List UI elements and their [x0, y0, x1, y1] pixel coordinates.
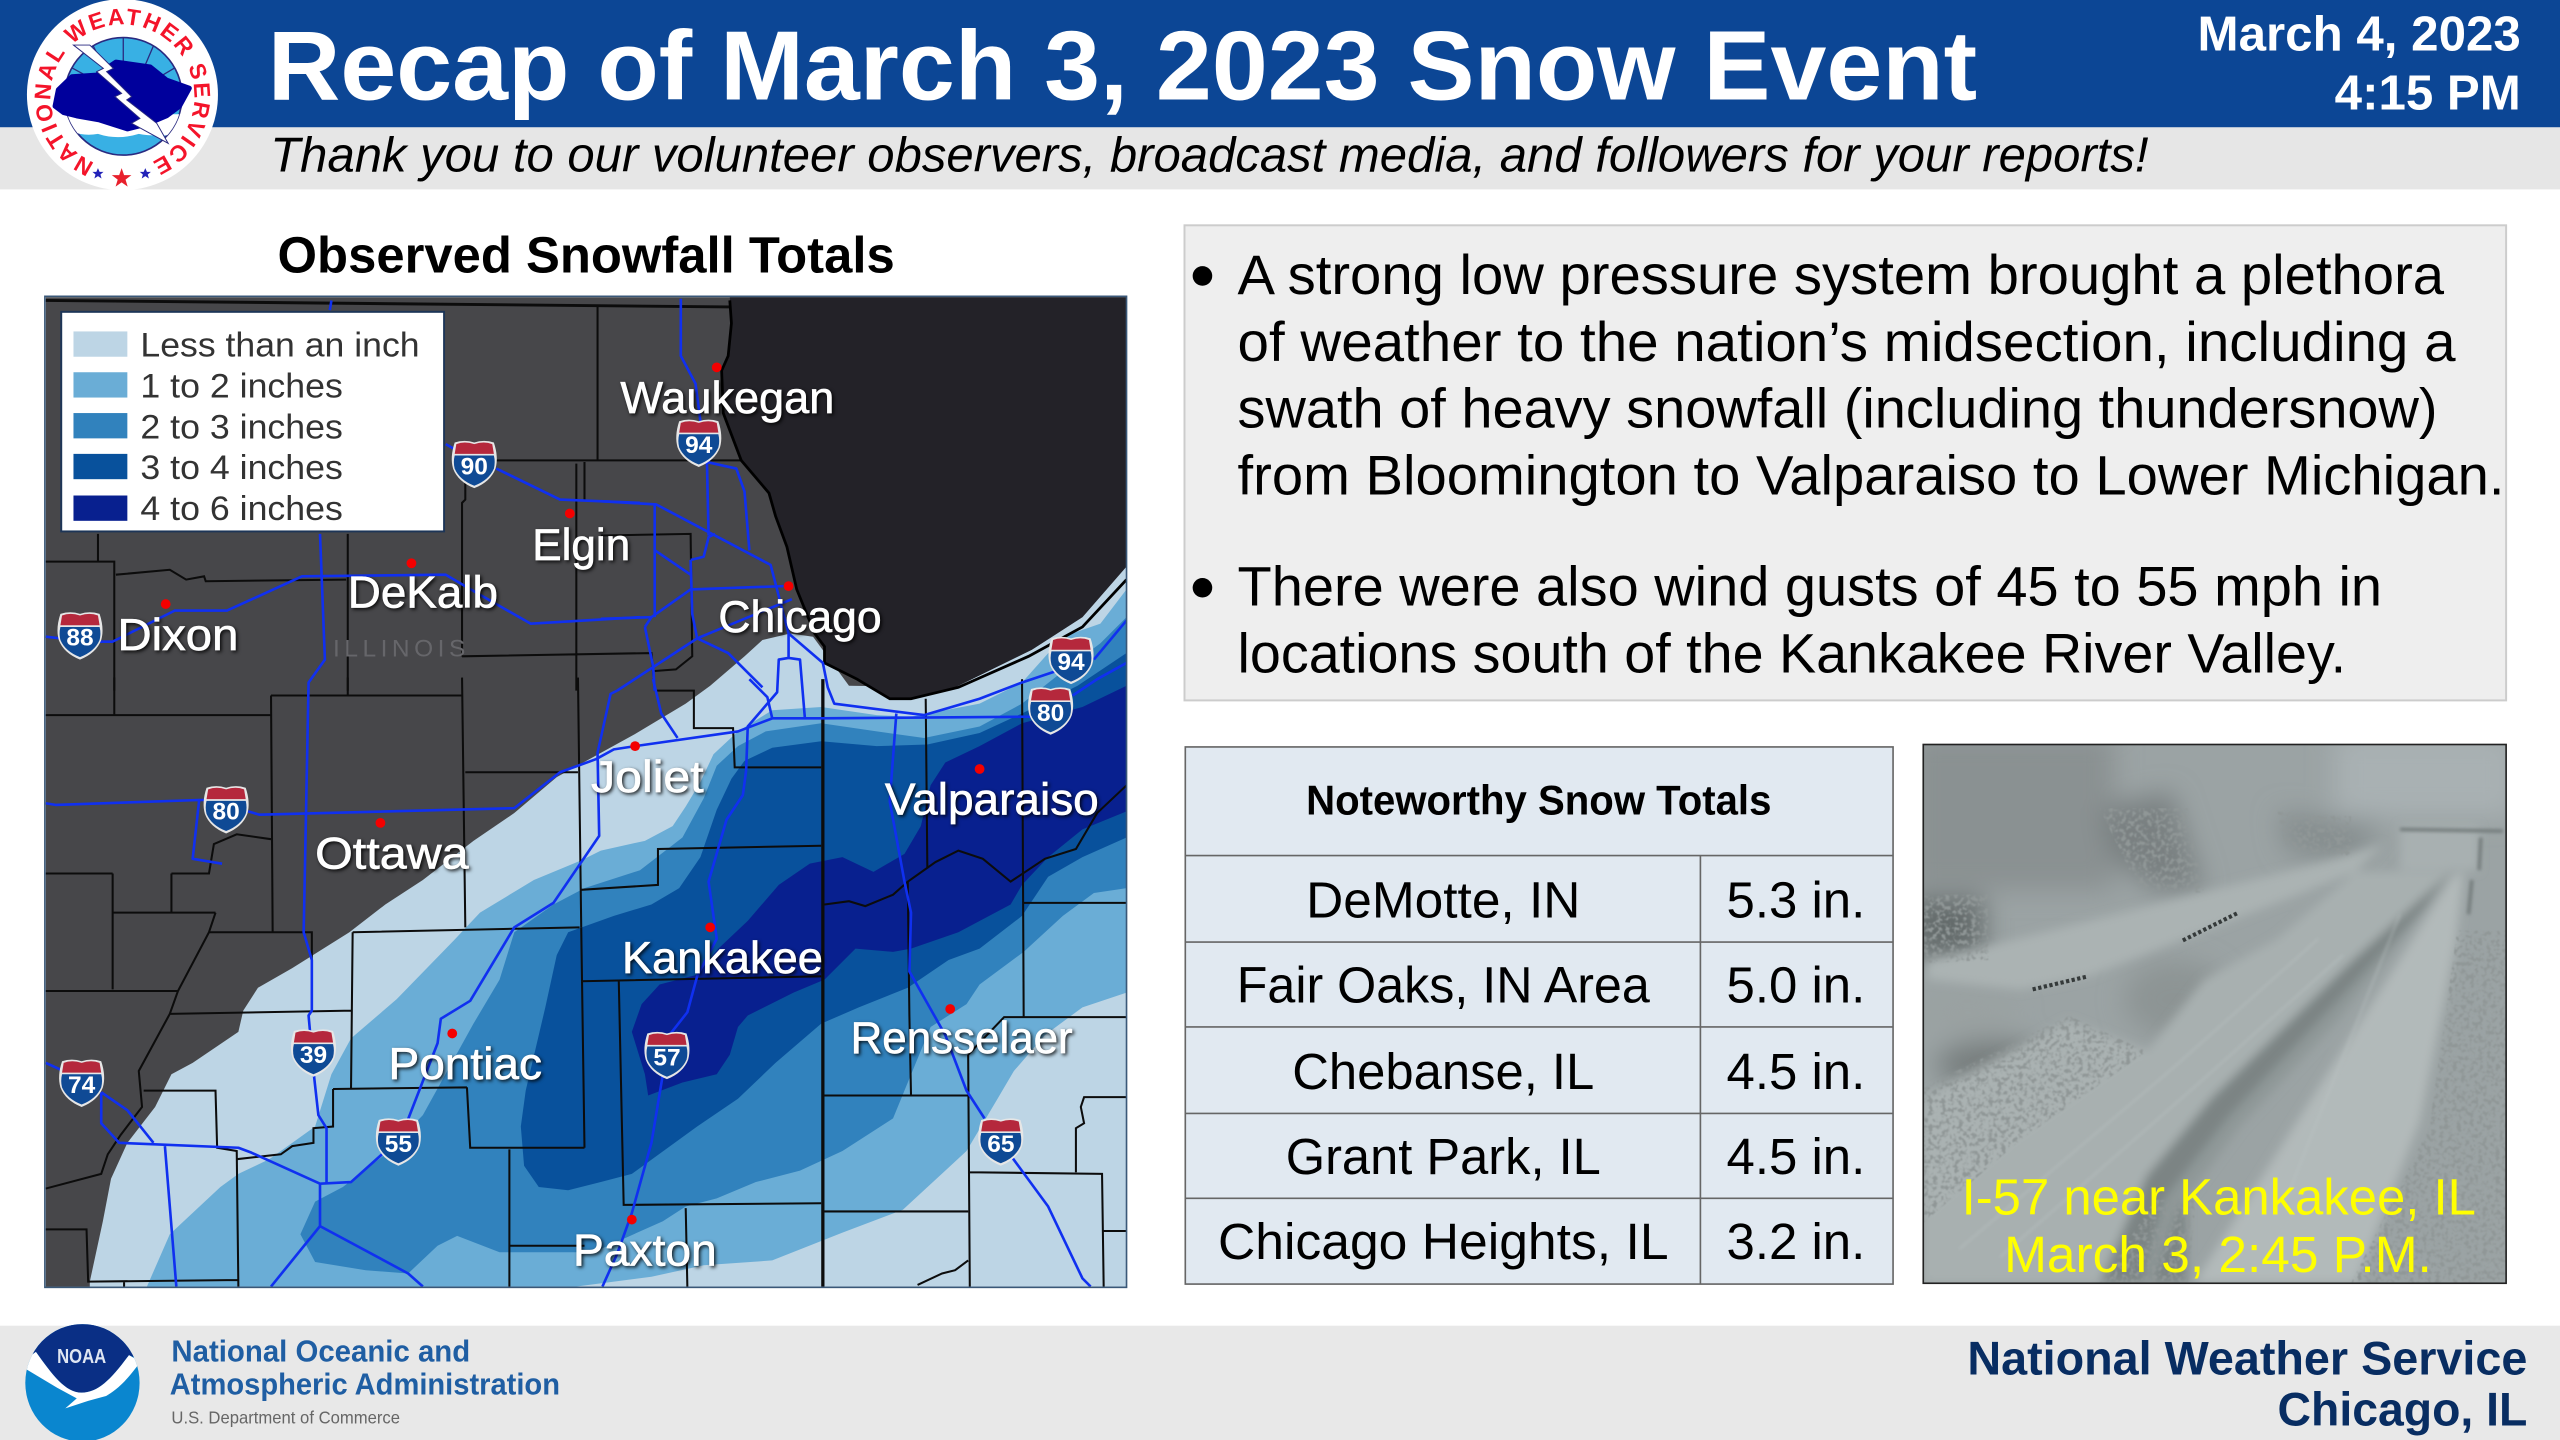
table: noteworthy snow totals: 3.2 in.: [1727, 1213, 1865, 1270]
panel: snowfall map: [45, 296, 1127, 1287]
table: noteworthy snow totals: 5.3 in.: [1727, 872, 1865, 929]
photo caption: March 3, 2:45 P.M.: [2004, 1226, 2432, 1283]
city labels: Rensselaer: [851, 1014, 1073, 1063]
table: noteworthy snow totals: Grant Park, IL: [1286, 1128, 1601, 1185]
legend: 4 to 6 inches: [140, 490, 343, 528]
table: noteworthy snow totals: Chebanse, IL: [1292, 1043, 1594, 1100]
map heading: Observed Snowfall Totals: [278, 227, 895, 284]
issue date and time: 4:15 PM: [2335, 66, 2521, 120]
table: noteworthy snow totals: [1185, 747, 1893, 1284]
state label: Illinois: ILLINOIS: [333, 635, 465, 662]
table: noteworthy snow totals: DeMotte, IN: [1306, 872, 1580, 929]
bullet: snowfall summary: [1193, 244, 2504, 507]
city labels: Chicago: [718, 593, 882, 642]
shield: I-90: [452, 441, 497, 488]
city labels: [118, 374, 1099, 1275]
shield: I-57: 57: [653, 1044, 681, 1071]
issue date and time: March 4, 2023: [2198, 8, 2521, 62]
city labels: Valparaiso: [885, 776, 1099, 825]
shield: I-65: [978, 1118, 1023, 1166]
bullet: snowfall summary: of weather to the nation’s midsection, including a: [1238, 311, 2456, 373]
shield: I-80 east: 80: [1037, 700, 1064, 727]
header bar: [0, 0, 2560, 127]
shield: I-65: 65: [987, 1131, 1014, 1158]
map frame: [45, 296, 1127, 1287]
city labels: Dixon: [118, 611, 238, 660]
shield: I-94 north: 94: [685, 432, 713, 459]
shield: I-94 north: [676, 420, 721, 467]
icon: NOAA logo: NOAA: [57, 1346, 106, 1368]
legend: 3 to 4 inches: [140, 449, 343, 487]
legend: 1 to 2 inches: [140, 368, 343, 406]
bullet: wind gusts: There were also wind gusts of 45 to 55 mph in: [1238, 556, 2382, 618]
subtitle: Thank you to our volunteer observers, broadcast media, and followers for your reports!: [270, 128, 2149, 182]
snow band: 2 to 3 inches: [300, 617, 1127, 1273]
photo: I-57 near Kankakee: [1910, 735, 2514, 1283]
NOAA wordmark: [170, 1336, 560, 1428]
subtitle band: [0, 127, 2560, 189]
shield: I-55: 55: [385, 1131, 412, 1158]
bullet: wind gusts: locations south of the Kankakee River Valley.: [1238, 623, 2346, 685]
table: noteworthy snow totals: 5.0 in.: [1727, 956, 1865, 1013]
city labels: Elgin: [532, 521, 630, 570]
city labels: Ottawa: [315, 830, 469, 879]
county lines: [46, 300, 1127, 1287]
snow band: 1 to 2 inches: [147, 589, 1127, 1287]
Lake Michigan: [722, 297, 1127, 699]
city labels: Joliet: [591, 753, 704, 802]
gravel texture: [1923, 808, 2506, 1283]
NOAA wordmark: U.S. Department of Commerce: [171, 1408, 400, 1428]
shield: I-80 west: [204, 786, 249, 833]
shield: I-74: [59, 1060, 104, 1107]
shield: I-80 east: [1028, 687, 1073, 735]
shield: I-88: [57, 612, 103, 660]
shield: I-57: [644, 1032, 689, 1079]
snow band: 4 to 6 inches: [632, 686, 1127, 1096]
shield: I-39: [291, 1029, 336, 1077]
footer bar: [0, 1326, 2560, 1440]
bullet: snowfall summary: A strong low pressure system brought a plethora: [1238, 244, 2444, 306]
icon: NOAA logo: [24, 1324, 140, 1440]
legend: 2 to 3 inches: [140, 408, 343, 446]
bullet: snowfall summary: from Bloomington to Valparaiso to Lower Michigan.: [1238, 445, 2504, 507]
NWS office name: [1967, 1333, 2527, 1436]
bullet: wind gusts: [1193, 556, 2382, 685]
issue date and time: [2198, 8, 2521, 120]
city labels: Paxton: [573, 1226, 717, 1275]
table: noteworthy snow totals: 4.5 in.: [1727, 1043, 1865, 1100]
NOAA wordmark: Atmospheric Administration: [170, 1368, 560, 1401]
shield: I-74: 74: [68, 1072, 96, 1099]
shield: I-39: 39: [300, 1042, 327, 1069]
lake shoreline: [722, 300, 1127, 699]
NOAA wordmark: National Oceanic and: [171, 1336, 470, 1369]
NWS office name: National Weather Service: [1967, 1333, 2527, 1386]
snow band: less than an inch: [90, 567, 1127, 1287]
snow band: 3 to 4 inches: [521, 653, 1127, 1190]
table: noteworthy snow totals: Noteworthy Snow Totals: [1306, 777, 1771, 824]
city location dots: [161, 362, 984, 1224]
shield: I-90: 90: [461, 453, 488, 480]
interstate highways: [46, 299, 1127, 1287]
bullet: snowfall summary: swath of heavy snowfall (including thundersnow): [1238, 378, 2438, 440]
table: noteworthy snow totals: Fair Oaks, IN Area: [1237, 956, 1651, 1013]
table: noteworthy snow totals: 4.5 in.: [1727, 1128, 1865, 1185]
shield: I-94 east: [1048, 637, 1094, 684]
shield: I-94 east: 94: [1057, 649, 1085, 676]
NWS office name: Chicago, IL: [2278, 1383, 2527, 1436]
shield: I-88: 88: [66, 625, 94, 652]
city labels: Waukegan: [620, 374, 834, 423]
table: noteworthy snow totals: Chicago Heights, IL: [1218, 1213, 1669, 1270]
city labels: Pontiac: [389, 1040, 542, 1089]
legend: [61, 312, 444, 531]
shield: I-55: [376, 1118, 421, 1166]
photo caption: [1962, 1169, 2476, 1283]
icon: NWS logo: NATIONAL WEATHER SERVICE: [34, 8, 210, 176]
city labels: Kankakee: [622, 934, 823, 983]
panel: event summary: [1184, 225, 2506, 700]
city labels: DeKalb: [348, 568, 498, 617]
shield: I-80 west: 80: [213, 799, 240, 826]
photo caption: I-57 near Kankakee, IL: [1962, 1169, 2476, 1226]
legend: Less than an inch: [140, 327, 420, 365]
guardrails and overpass: [2033, 913, 2238, 989]
title: Recap of March 3, 2023 Snow Event: [268, 11, 1977, 121]
